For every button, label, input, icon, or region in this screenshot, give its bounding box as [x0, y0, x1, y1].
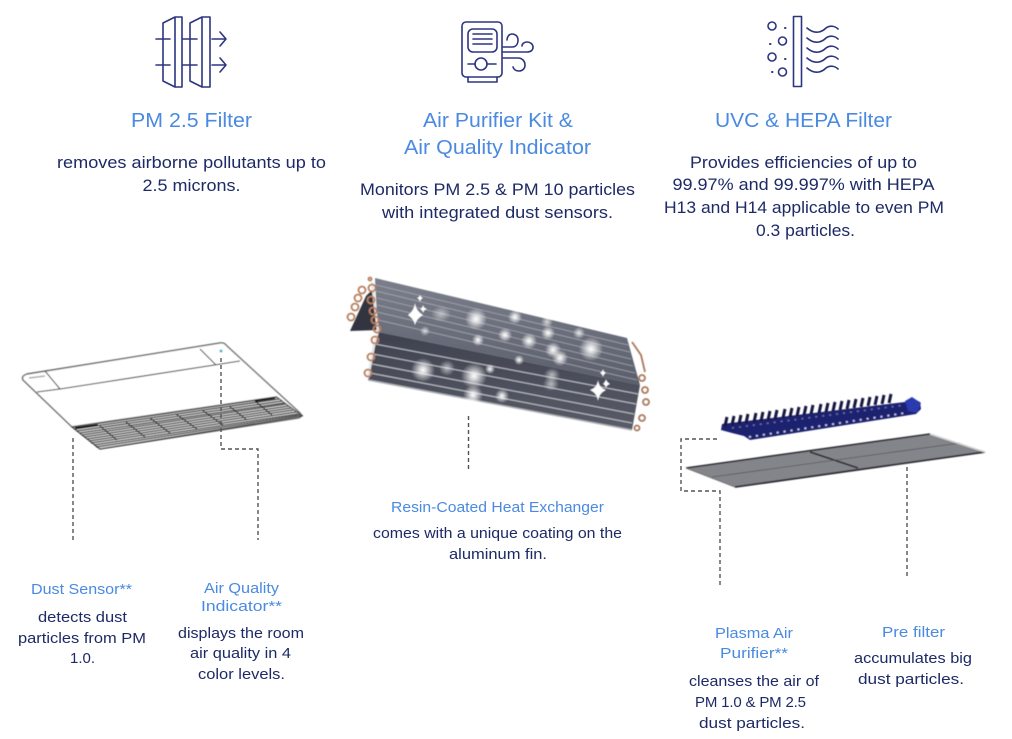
caption: Dust Sensor: Dust Sensor**: [31, 581, 132, 598]
heading: Air Purifier Kit and Air Quality Indicator: [404, 110, 591, 159]
caption: Air Quality Indicator: Indicator**: [201, 598, 282, 615]
leader: pre filter: [906, 467, 908, 578]
leader: dust sensor: [72, 438, 74, 541]
text: Pre filter description: accumulates big: [854, 650, 972, 667]
caption: Pre filter: Pre filter: [882, 624, 945, 641]
caption: Air Quality Indicator: Air Quality: [204, 580, 280, 597]
text: Plasma Air Purifier description: dust particles.: [699, 715, 805, 732]
text: UVC and HEPA description: Provides efficiencies of up to: [690, 153, 917, 172]
caption: Air Quality Indicator: [201, 580, 282, 615]
text: Plasma Air Purifier description: PM 1.0 & PM 2.5: [695, 694, 806, 711]
text: Dust Sensor description: particles from PM: [18, 630, 146, 647]
icon: PM 2.5 filter: [156, 17, 226, 87]
caption: Plasma Air Purifier: Plasma Air: [715, 625, 793, 642]
caption: Resin-Coated Heat Exchanger: Resin-Coated Heat Exchanger: [391, 499, 604, 516]
text: Dust Sensor description: 1.0.: [70, 650, 95, 667]
text: Plasma Air Purifier description: [689, 673, 820, 732]
text: Air Quality Indicator description: [178, 625, 304, 683]
text: PM 2.5 filter description: removes airborne pollutants up to: [57, 153, 326, 172]
text: Pre filter description: dust particles.: [858, 671, 964, 688]
icon: UVC and HEPA filter: [768, 16, 838, 86]
text: UVC and HEPA description: [664, 153, 944, 240]
illustration: pre filter: [686, 434, 985, 487]
heading: PM 2.5 Filter: PM 2.5 Filter: [131, 110, 252, 132]
text: air purifier description: [360, 180, 635, 222]
text: UVC and HEPA description: 0.3 particles.: [756, 221, 855, 240]
text: Dust Sensor description: [18, 609, 146, 667]
illustration: ceiling cassette panel: [22, 343, 303, 449]
text: PM 2.5 filter description: [57, 153, 326, 195]
leader: plasma air purifier: [681, 439, 720, 587]
text: Air Quality Indicator description: displays the room: [178, 625, 304, 642]
caption: Plasma Air Purifier: Purifier**: [720, 645, 788, 662]
text: PM 2.5 filter description: 2.5 microns.: [142, 176, 240, 195]
heading: Air Purifier Kit and Air Quality Indicator: Air Quality Indicator: [404, 137, 591, 159]
illustration: resin-coated heat exchanger: [348, 278, 649, 430]
text: Dust Sensor description: detects dust: [38, 609, 128, 626]
text: air purifier description: with integrated dust sensors.: [381, 203, 613, 222]
illustration: plasma air purifier bar: [721, 394, 921, 440]
text: UVC and HEPA description: 99.97% and 99.997% with HEPA: [672, 175, 935, 194]
heading: Air Purifier Kit and Air Quality Indicator: Air Purifier Kit &: [423, 110, 574, 132]
icon: air purifier: [462, 22, 533, 82]
text: Plasma Air Purifier description: cleanses the air of: [689, 673, 820, 690]
text: air purifier description: Monitors PM 2.5 & PM 10 particles: [360, 180, 635, 199]
heading: UVC and HEPA Filter: UVC & HEPA Filter: [715, 110, 892, 132]
text: Pre filter description: [854, 650, 972, 688]
leader: air quality indicator: [221, 358, 258, 540]
caption: Plasma Air Purifier: [715, 625, 793, 662]
text: heat exchanger description: [373, 525, 622, 563]
text: heat exchanger description: comes with a unique coating on the: [373, 525, 622, 542]
text: UVC and HEPA description: H13 and H14 applicable to even PM: [664, 198, 944, 217]
text: Air Quality Indicator description: air quality in 4: [190, 645, 291, 662]
text: heat exchanger description: aluminum fin.: [449, 546, 547, 563]
leader: heat exchanger: [468, 416, 470, 471]
text: Air Quality Indicator description: color levels.: [198, 666, 285, 683]
